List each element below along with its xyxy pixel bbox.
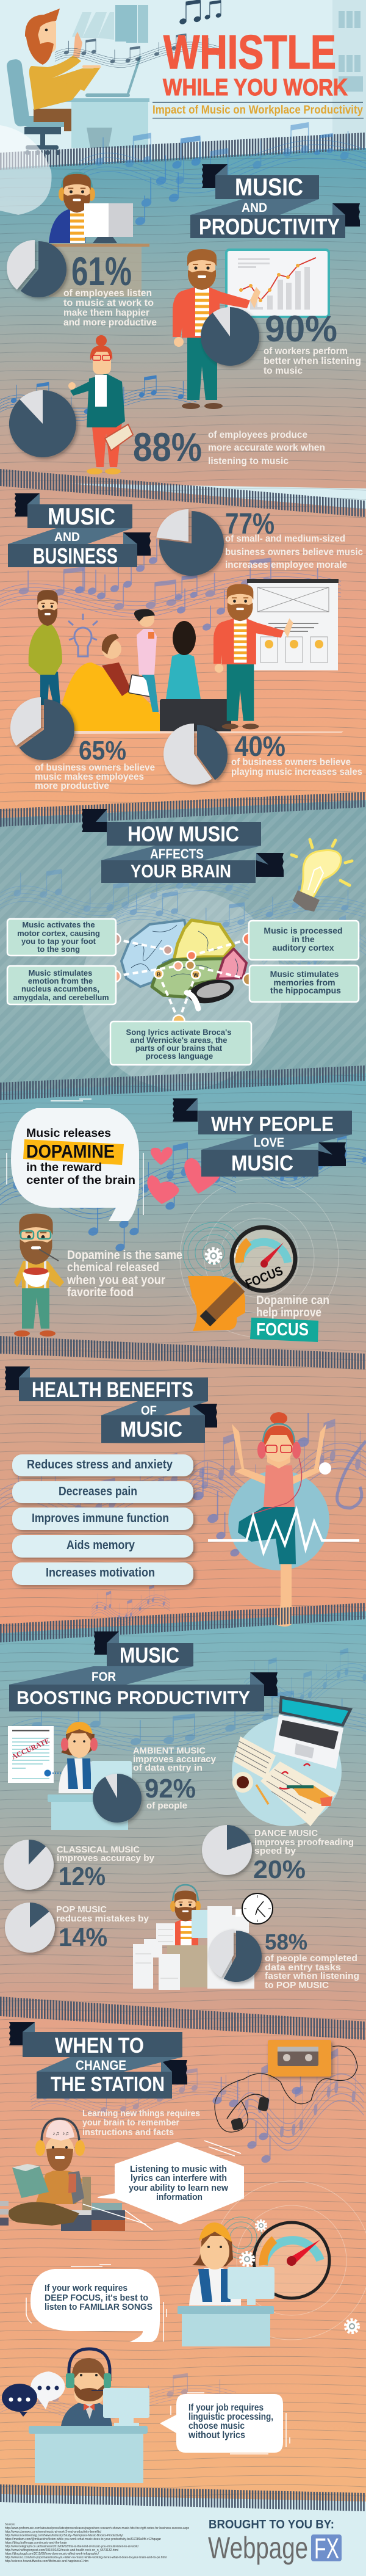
- illustration: focus head with magnifier gauge: FOCUS: [243, 1264, 285, 1291]
- sources list: https://medium.com/@mikaelcho/listen-while-you-work-what-music-does-to-your-productivity-be317289a0f#.v12hqagar: [5, 2538, 161, 2541]
- banner: when to change the station: CHANGE: [76, 2058, 126, 2073]
- person: man reading on book stacks: [0, 2119, 125, 2231]
- person: man in green sweater: [29, 590, 62, 705]
- sources list: http://www.huffingtonpost.com/2015/02/02/music-and-health-rock-on_n_6573132.html: [5, 2549, 118, 2552]
- stat: dance music 20 percent: [253, 1829, 354, 1884]
- divider: stripes into why people section: [0, 1065, 366, 1100]
- benefit pill: stress: [12, 1454, 193, 1476]
- person: woman at computer: [189, 2222, 241, 2306]
- banner: boosting productivity: BOOSTING PRODUCTIVITY: [16, 1687, 250, 1708]
- callout: emotion: emotion from the: [28, 976, 93, 985]
- banner: how music affects your brain: HOW MUSIC: [127, 822, 239, 846]
- divider: stripes into boosting section: [0, 1603, 366, 1642]
- decorative background notes: [0, 1134, 366, 1252]
- person: man in teal sweater: [166, 621, 201, 699]
- banner: how music affects your brain: AFFECTS: [150, 846, 204, 862]
- stat: pop music 14 percent: POP MUSIC: [56, 1905, 107, 1915]
- person: man with headphones at desk: [49, 173, 149, 297]
- person: man behind paper stacks with clock: [133, 1885, 254, 1990]
- stat: 61 percent: to music at work to: [63, 298, 154, 308]
- sources list: Sources:: [5, 2523, 15, 2527]
- panel: header with whistling man and title: [6, 0, 366, 155]
- panel: why people love music: [0, 1098, 366, 1342]
- divider: stripes into business section: [0, 469, 366, 517]
- banner: why people love music: LOVE: [254, 1136, 284, 1150]
- panel: music and productivity: [0, 122, 366, 474]
- office chair: [6, 59, 70, 155]
- icon: cassette player with headphones: [215, 2040, 357, 2132]
- benefit pill: immune: [12, 1508, 193, 1530]
- callout: auditory cortex: Music is processed: [264, 926, 343, 935]
- illustration: speed gauge with gears: [212, 2181, 366, 2340]
- sources list: http://www.incentivemag.com/News/Industry/Study--Workplace-Music-Boosts-Productivity/: [5, 2534, 123, 2538]
- banner: music and business: [8, 493, 151, 568]
- callout: hippocampus: [249, 965, 359, 1002]
- stat: dance music 20 percent: 20%: [253, 1855, 306, 1884]
- pie chart: 40 percent: [163, 724, 228, 785]
- benefit pill: motivation: [12, 1562, 193, 1585]
- benefit pill: stress: Reduces stress and anxiety: [27, 1458, 173, 1471]
- person: man reading on book stacks: ♪♫: [62, 2130, 69, 2136]
- stat: 61 percent: [63, 249, 157, 328]
- logo: WebpageFX: Webpage: [208, 2531, 308, 2565]
- stat: 90 percent: [264, 308, 361, 376]
- speech bubble: linguistic processing: [160, 2393, 290, 2454]
- stat: 40 percent: of business owners believe: [231, 757, 351, 767]
- text: learning new things: your brain to remember: [82, 2117, 179, 2128]
- speech bubble: dopamine: in the reward: [26, 1161, 102, 1174]
- banner: music and productivity: AND: [242, 201, 267, 215]
- icon: wall clock: [242, 1893, 273, 1924]
- stat: 61 percent: and more productive: [63, 317, 157, 328]
- stat: 90 percent: 90%: [265, 308, 337, 349]
- callout: hippocampus: Music stimulates: [270, 969, 339, 979]
- callout: song lyrics: parts of our brains that: [135, 1043, 223, 1053]
- stat: 40 percent: playing music increases sales: [231, 767, 362, 777]
- stat: dance music 20 percent: improves proofreading: [254, 1838, 354, 1848]
- person: woman with headphones at desk: [59, 1722, 98, 1793]
- desk and monitor: [48, 1761, 132, 1830]
- banner: health benefits of music: [5, 1366, 217, 1443]
- person: man reading on book stacks: ♪♫: [52, 2130, 59, 2136]
- benefit pill: memory: [12, 1535, 193, 1558]
- heartbeat line: [208, 1510, 359, 1553]
- stat: pop music 14 percent: [56, 1905, 149, 1951]
- speech bubble: linguistic processing: linguistic processing,: [188, 2412, 273, 2422]
- stat: classical music 12 percent: 12%: [59, 1862, 106, 1890]
- callout: hippocampus: memories from: [273, 978, 336, 987]
- decorative background notes: [0, 1413, 366, 1625]
- logo: WebpageFX: FX: [314, 2532, 339, 2564]
- text: learning new things: [82, 2108, 200, 2138]
- stat: 40 percent: 40%: [234, 730, 285, 762]
- callout: emotion: [7, 966, 116, 1004]
- panel: when to change the station: [0, 2022, 366, 2483]
- banner: music and business: AND: [54, 531, 80, 544]
- stat: dance music 20 percent: speed by: [254, 1846, 296, 1856]
- stat: classical music 12 percent: [57, 1845, 154, 1890]
- banner: when to change the station: THE STATION: [51, 2073, 165, 2096]
- sources list: https://blog.bufferapp.com/music-and-the-brain: [5, 2541, 67, 2545]
- pie chart: 90 percent: [201, 307, 259, 366]
- illustration: laptop proofreading desk: [232, 1696, 353, 1826]
- stat: 58 percent: data entry tasks: [265, 1963, 341, 1973]
- stat: 65 percent: music makes employees: [35, 772, 144, 782]
- banner: health benefits of music: HEALTH BENEFITS: [32, 1378, 193, 1402]
- stat: 58 percent: faster when listening: [265, 1972, 359, 1981]
- person: presenter in red jacket: [173, 249, 260, 409]
- callout: song lyrics: [110, 1021, 251, 1065]
- chart on board: [226, 250, 329, 317]
- banner: music and productivity: [190, 164, 360, 239]
- illustration: focus head with magnifier gauge: [180, 1178, 339, 1337]
- speech bubble: linguistic processing: choose music: [188, 2421, 245, 2431]
- stat: 88 percent: listening to music: [208, 456, 289, 466]
- pie chart: 92 percent: [93, 1774, 142, 1823]
- pie chart: 88 percent: [9, 390, 76, 457]
- speech bubble: deep focus: listen to FAMILIAR SONGS: [45, 2302, 152, 2312]
- stat: ambient music 92 percent: improves accuracy: [133, 1755, 216, 1765]
- icon: light bulb: [68, 614, 98, 656]
- stat: 58 percent: to POP MUSIC: [265, 1981, 329, 1990]
- callout: emotion: nucleus accumbens,: [21, 984, 99, 993]
- stat: 61 percent: make them happier: [63, 308, 149, 318]
- pie chart: 14 percent: [5, 1903, 55, 1953]
- speech bubble: dopamine: Music releases: [26, 1127, 111, 1140]
- decorative background notes: [0, 539, 341, 631]
- stat: 65 percent: [35, 736, 155, 791]
- stat: 88 percent: 88%: [133, 424, 202, 470]
- stat: 58 percent: of people completed: [265, 1954, 357, 1964]
- icon: hearts: [147, 1147, 221, 1204]
- callout: motor cortex: [7, 919, 116, 956]
- callout: motor cortex: motor cortex, causing: [17, 929, 100, 938]
- stat: 90 percent: to music: [264, 366, 303, 376]
- speech bubble: dopamine: [7, 1099, 143, 1221]
- stat: 58 percent: [265, 1929, 359, 1990]
- stat: classical music 12 percent: CLASSICAL MUSIC: [57, 1845, 140, 1855]
- callout: auditory cortex: auditory cortex: [272, 943, 334, 952]
- stat: 65 percent: more productive: [35, 781, 109, 791]
- callout: emotion: amygdala, and cerebellum: [13, 993, 109, 1002]
- text: learning new things: instructions and facts: [82, 2127, 174, 2138]
- stat: 90 percent: better when listening: [264, 356, 361, 366]
- pale circle behind brain: [81, 888, 282, 1090]
- text: dopamine focus: Dopamine can: [256, 1294, 329, 1307]
- banner: music and business: BUSINESS: [33, 543, 118, 568]
- sources list: http://www.prsformusic.com/aboutus/press/latestpressreleases/pages/new-research-shows-music-hits-the-right-notes-for-business-success.aspx: [5, 2527, 189, 2530]
- laptop: [85, 56, 140, 97]
- stat: ambient music 92 percent: AMBIENT MUSIC: [133, 1746, 206, 1756]
- panel: music and business: [0, 493, 363, 791]
- text: learning new things: Learning new things requires: [82, 2108, 200, 2119]
- stat: pop music 14 percent: reduces mistakes by: [56, 1914, 149, 1924]
- speech bubble: lyrics interfere: Listening to music with: [130, 2164, 227, 2174]
- connectors and brain markers: W: [193, 972, 199, 978]
- stat: 77 percent: of small- and medium-sized: [225, 534, 345, 544]
- bookshelf backdrop: [332, 0, 366, 147]
- speech bubble: deep focus: If your work requires: [45, 2284, 127, 2293]
- stat: 77 percent: 77%: [225, 508, 274, 540]
- decorative background notes: [0, 122, 366, 421]
- person: man eating: [14, 1214, 64, 1337]
- stat: ambient music 92 percent: [133, 1746, 216, 1811]
- pie chart: 65 percent: [10, 697, 74, 760]
- callout: song lyrics: process language: [146, 1051, 213, 1061]
- sources list: http://www.cbsnews.com/news/music-at-work-3-real-productivity-benefits/: [5, 2530, 101, 2534]
- callout: motor cortex: Music activates the: [22, 920, 95, 929]
- document: accurate: [8, 1726, 98, 1783]
- banner: when to change the station: [9, 2022, 187, 2099]
- text: dopamine food: Dopamine is the same: [67, 1249, 182, 1262]
- banner: when to change the station: WHEN TO: [55, 2034, 144, 2058]
- divider: stripes into when to change section: [0, 1997, 366, 2040]
- panel: footer: [5, 2518, 342, 2565]
- music staff from whistle: [55, 0, 221, 68]
- connectors and brain markers: [109, 933, 255, 1027]
- person: woman with clipboard: [68, 335, 133, 474]
- waste bin: [87, 128, 112, 148]
- icon: glowing light bulb: [292, 840, 352, 912]
- stat: 61 percent: 61%: [71, 249, 132, 294]
- pie chart: 61 percent: [7, 240, 66, 297]
- benefit pill: pain: [12, 1481, 193, 1503]
- stat: 77 percent: increases employee morale: [225, 560, 347, 570]
- sources list: http://science.howstuffworks.com/life/music-and-happiness1.htm: [5, 2560, 88, 2563]
- desk: [64, 98, 149, 148]
- banner: music and productivity: MUSIC: [235, 174, 303, 201]
- callout: song lyrics: and Wernicke's areas, the: [131, 1036, 227, 1045]
- callout: auditory cortex: [249, 921, 359, 960]
- decorative background notes: [0, 860, 366, 978]
- banner: how music affects your brain: [82, 809, 284, 883]
- desk and monitor: [29, 2388, 149, 2483]
- speech bubble: deep focus: DEEP FOCUS, it's best to: [45, 2293, 148, 2303]
- binders on shelf: [72, 5, 148, 43]
- speech bubble: dopamine: center of the brain: [26, 1174, 135, 1187]
- text: dopamine food: [66, 1249, 182, 1299]
- banner: why people love music: [173, 1098, 352, 1177]
- speech bubble: deep focus: [26, 2265, 167, 2342]
- divider: stripes into footer: [0, 2484, 366, 2511]
- text: dopamine focus: help improve: [256, 1306, 321, 1319]
- speech bubble: linguistic processing: If your job requires: [188, 2403, 264, 2413]
- decorative background notes: [30, 2048, 364, 2164]
- banner: why people love music: MUSIC: [231, 1152, 293, 1175]
- divider: stripes into health section: [0, 1336, 366, 1370]
- stat: classical music 12 percent: improves accuracy by: [57, 1854, 154, 1863]
- panel: health benefits of music: [0, 1366, 366, 1627]
- sources list: http://www.telegraph.co.uk/business/2016/06/02/this-is-the-kind-of-music-you-should-listen-to-at-work/: [5, 2545, 138, 2549]
- divider: stripes into brain section: [0, 792, 366, 827]
- banner: boosting productivity: FOR: [92, 1670, 116, 1684]
- callout: song lyrics: Song lyrics activate Broca's: [126, 1028, 231, 1037]
- pie chart: 58 percent: [208, 1929, 262, 1982]
- decorative background notes: [0, 2373, 236, 2422]
- desk and monitor: [178, 2267, 274, 2346]
- person: presenter: [214, 584, 293, 729]
- stat: ambient music 92 percent: of data entry in: [133, 1763, 203, 1773]
- benefit pill: pain: Decreases pain: [59, 1485, 137, 1498]
- banner: music and business: MUSIC: [48, 504, 115, 530]
- benefit pill: motivation: Increases motivation: [46, 1566, 155, 1580]
- text: dopamine food: when you eat your: [66, 1274, 165, 1287]
- banner: music and productivity: PRODUCTIVITY: [199, 214, 340, 239]
- stat: ambient music 92 percent: 92%: [145, 1774, 196, 1804]
- ottoman: [160, 699, 231, 732]
- banner: boosting productivity: MUSIC: [120, 1644, 179, 1667]
- banner: how music affects your brain: YOUR BRAIN: [131, 862, 231, 882]
- icon: chat bubbles: [2, 2371, 65, 2417]
- beanbag with seated man: [61, 634, 161, 733]
- stat: 65 percent: of business owners believe: [35, 763, 155, 773]
- pie chart: 77 percent: [156, 509, 224, 576]
- text: dopamine food: favorite food: [67, 1286, 134, 1299]
- sources list: http://www.inc.com/tom-popomaronis/do-you-listen-to-music-while-working-heres-what-it-does-to-your-brain-and-its-pe.html: [5, 2556, 167, 2560]
- stat: dance music 20 percent: DANCE MUSIC: [254, 1829, 318, 1838]
- person: man with headset: [61, 2349, 112, 2426]
- stat: 61 percent: of employees listen: [63, 288, 152, 299]
- callout: hippocampus: the hippocampus: [270, 985, 341, 995]
- sources list: https://blog.toggl.com/2015/06/how-does-music-affect-work-infographic/: [5, 2552, 99, 2556]
- presentation board: [247, 579, 339, 670]
- person: woman doing yoga with headphones: [228, 1412, 331, 1627]
- stat: 88 percent: of employees produce: [208, 430, 307, 440]
- floor line: [74, 731, 343, 734]
- sources list: [5, 2523, 189, 2563]
- speech bubble: dopamine: DOPAMINE: [26, 1141, 115, 1162]
- speech bubble: lyrics interfere: your ability to learn new: [129, 2183, 229, 2193]
- stat: ambient music 92 percent: of people: [146, 1801, 187, 1811]
- banner: why people love music: WHY PEOPLE: [211, 1112, 334, 1135]
- speech bubble: lyrics interfere: [83, 2141, 243, 2230]
- stat: 77 percent: business owners believe music: [225, 547, 363, 557]
- benefit pill: memory: Aids memory: [66, 1539, 135, 1552]
- panel: how music affects your brain: [0, 809, 366, 1090]
- stat: 88 percent: [133, 424, 325, 470]
- callout: emotion: Music stimulates: [29, 968, 92, 978]
- callout: motor cortex: to the song: [37, 945, 80, 954]
- pie chart: 12 percent: [4, 1840, 54, 1890]
- callout: auditory cortex: in the: [292, 934, 315, 944]
- stat: 88 percent: more accurate work when: [208, 443, 325, 453]
- divider: stripes under header: [0, 132, 366, 170]
- text: dopamine food: chemical released: [67, 1261, 159, 1274]
- text: dopamine focus: FOCUS: [256, 1320, 309, 1340]
- decorative background notes: [12, 1648, 366, 1753]
- whistling man: [25, 9, 101, 131]
- illustration: brain: [121, 920, 246, 1009]
- banner: health benefits of music: MUSIC: [120, 1418, 182, 1442]
- document: accurate: ACCURATE: [10, 1736, 51, 1761]
- stat: 40 percent: [231, 730, 362, 777]
- connectors and brain markers: B: [157, 971, 161, 978]
- stat: 58 percent: 58%: [265, 1929, 307, 1954]
- banner: boosting productivity: [9, 1631, 278, 1711]
- stat: pop music 14 percent: 14%: [59, 1923, 107, 1951]
- benefit pill: immune: Improves immune function: [32, 1512, 169, 1525]
- speech bubble: lyrics interfere: lyrics can interfere with: [131, 2174, 227, 2183]
- stat: 77 percent: [225, 508, 363, 570]
- speech bubble: linguistic processing: without lyrics: [188, 2430, 245, 2440]
- stat: 90 percent: of workers perform: [264, 346, 348, 357]
- banner: health benefits of music: OF: [141, 1404, 157, 1418]
- stat: 65 percent: 65%: [79, 736, 126, 766]
- pie chart: 20 percent: [202, 1825, 252, 1875]
- text: dopamine focus: [250, 1294, 329, 1342]
- callout: motor cortex: you to tap your foot: [21, 937, 96, 946]
- panel: music for boosting productivity: [4, 1631, 366, 1990]
- speech bubble: lyrics interfere: information: [156, 2193, 203, 2202]
- credit: brought to you by: BROUGHT TO YOU BY:: [209, 2518, 334, 2531]
- person: woman with mug: [134, 609, 159, 712]
